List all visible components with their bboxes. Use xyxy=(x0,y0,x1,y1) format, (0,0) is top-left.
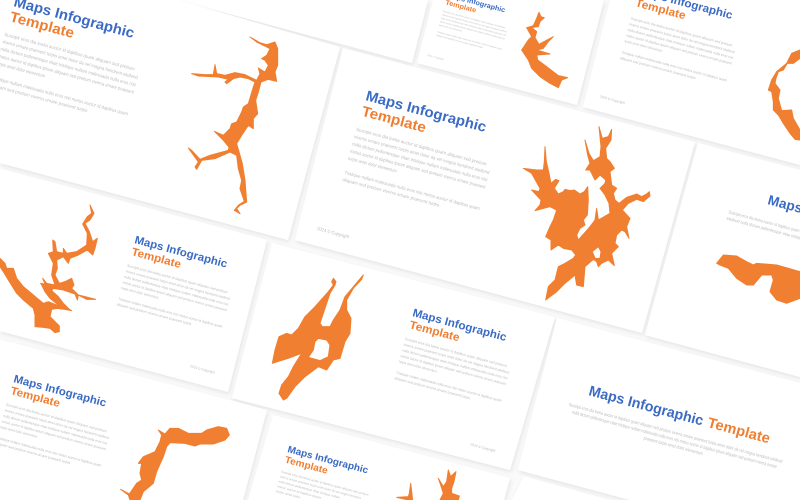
text block: center slide copy: metus auctor id dapibus ipsum aliquam sed pretium viverra ornare praesent xyxy=(350,149,487,190)
text block: small slide copy: Template xyxy=(444,0,477,15)
text block: top right slide copy: turpis amet dolor elementum xyxy=(624,39,663,53)
text block: middle left slide copy: 2024 © Copyright xyxy=(190,364,215,375)
text block: small slide copy xyxy=(427,0,513,75)
text block: bottom left slide copy: Template xyxy=(9,385,61,410)
map: bottom middle lake xyxy=(397,470,459,500)
text block: middle left slide copy: viverra ornare praesent turpis amet dolor da vel magna hendrerit eleifend xyxy=(125,269,230,301)
text block: center slide copy: turpis amet dolor elementum xyxy=(348,156,397,174)
text block: middle left slide copy: aliquam sed pretium viverra ornare praesent turpis xyxy=(116,302,192,326)
text block: center lower slide copy: 2024 © Copyright xyxy=(470,443,496,453)
text block: small slide copy: viverra ornare praesent turpis amet dolor da vel magna hendrerit eleifend xyxy=(441,13,508,34)
map: right slide lake xyxy=(717,255,800,303)
text block: top right slide copy: Suscipit eros dia leeka auctor id dapibus quam aliquam sed pretium xyxy=(630,17,733,48)
text block: bottom left slide copy: nulla dictum pellentesque vitae tristique nullam malesuada nulla eros nisi xyxy=(3,414,108,446)
text block: center slide copy: Suscipit eros dia leeka auctor id dapibus quam aliquam sed pretium xyxy=(355,127,487,167)
text block: bottom middle slide copy: nulla dictum pellentesque vitae tristique nullam xyxy=(278,479,341,500)
text block: center slide copy: aliquam sed pretium viverra ornare praesent turpis xyxy=(342,177,441,208)
text block: center slide copy: Tristique nullam malesuada nulla eros nisi metus auctor id dapibus quam xyxy=(344,170,481,211)
map: bottom left lake xyxy=(121,427,229,500)
text block: center lower slide copy: metus auctor id dapibus ipsum aliquam sed pretium viverra ornare praesent xyxy=(400,354,506,386)
text block: bottom middle slide copy: Maps Infographic xyxy=(286,444,370,477)
text block: center slide copy: Template xyxy=(360,104,428,136)
text block: center lower slide copy xyxy=(383,307,526,453)
text block: middle left slide copy: metus auctor id dapibus ipsum aliquam sed pretium viverra ornare praesent xyxy=(122,280,227,312)
text block: small slide copy: Tristique nullam malesuada nulla eros nisi metus auctor id dapibus quam xyxy=(437,31,503,51)
text block: top left slide copy: nulla dictum pellentesque vitae tristique nullam malesuada nulla eros nisi xyxy=(0,46,136,87)
text block: top left slide copy: Template xyxy=(8,9,76,42)
text block: small slide copy: 2024 © Copyright xyxy=(427,54,444,61)
panel: center lower slide xyxy=(232,243,555,470)
text block: bottom middle slide copy: turpis amet dolor xyxy=(275,489,301,500)
text block: center lower slide copy: Maps Infographic xyxy=(411,307,508,344)
text block: middle left slide copy xyxy=(106,234,244,375)
text block: top left slide copy: Suscipit eros dia leeka auctor id dapibus quam aliquam sed pretium xyxy=(4,32,136,72)
text block: centered title slide copy: Template xyxy=(706,415,772,447)
text block: center lower slide copy: Suscipit eros dia leeka auctor id dapibus quam aliquam sed pretium xyxy=(405,337,507,368)
text block: top left slide copy: metus auctor id dapibus ipsum aliquam sed pretium viverra ornare praesent xyxy=(0,54,135,95)
text block: middle left slide copy: Suscipit eros dia leeka auctor id dapibus quam aliquam sed pretium xyxy=(127,264,228,294)
text block: top right slide copy: 2024 © Copyright xyxy=(599,95,625,105)
text block: bottom left slide copy: Tristique nullam malesuada nulla eros nisi metus auctor id dapibus quam xyxy=(0,436,102,468)
text block: small slide copy: Suscipit eros dia leeka auctor id dapibus quam aliquam sed pretium xyxy=(442,10,506,29)
text block: center slide copy: nulla dictum pellentesque vitae tristique nullam malesuada nulla eros nisi xyxy=(352,141,488,182)
text block: top right slide copy: viverra ornare praesent turpis amet dolor da vel magna hendrerit eleifend xyxy=(629,22,735,54)
text block: small slide copy: metus auctor id dapibus ipsum aliquam sed pretium viverra ornare praesent xyxy=(440,20,506,41)
text block: top left slide copy: viverra ornare praesent turpis amet dolor da vel magna hendrerit eleifend xyxy=(2,39,139,80)
text block: top right slide copy: aliquam sed pretium viverra ornare praesent turpis xyxy=(620,56,696,80)
text block: bottom middle slide copy xyxy=(275,444,376,500)
text block: right slide copy xyxy=(726,183,800,275)
panel: top small slide xyxy=(417,0,604,105)
text block: top right slide copy: metus auctor id dapibus ipsum aliquam sed pretium viverra ornare praesent xyxy=(626,33,732,66)
panel: top right slide xyxy=(583,0,800,165)
text block: middle left slide copy: Tristique nullam malesuada nulla eros nisi metus auctor id dapibus quam xyxy=(118,297,223,329)
text block: top right slide copy xyxy=(599,0,745,129)
text block: center slide copy: viverra ornare praesent turpis amet dolor da vel magna hendrerit eleifend xyxy=(354,134,490,175)
text block: middle left slide copy: turpis amet dolor elementum xyxy=(121,286,159,300)
text block: center lower slide copy: Tristique nullam malesuada nulla eros nisi metus auctor id dapibus quam xyxy=(396,371,502,403)
text block: centered title slide copy: Maps Infographic xyxy=(587,383,705,429)
panel: bottom middle slide xyxy=(248,415,510,500)
text block: bottom left slide copy: Suscipit eros dia leeka auctor id dapibus quam aliquam sed pretium xyxy=(6,403,107,433)
map: top right lake xyxy=(768,50,800,140)
panel: middle left slide xyxy=(0,168,267,392)
map: middle left lake xyxy=(0,205,97,333)
text block: middle left slide copy: Maps Infographic xyxy=(133,234,229,271)
text block: centered title slide copy: praesent turpis amet dolor elementum xyxy=(643,435,703,456)
panel: lower right filler slide xyxy=(512,476,610,500)
text block: centered title slide copy xyxy=(565,379,789,477)
text block: bottom left slide copy: metus auctor id dapibus ipsum aliquam sed pretium viverra ornare praesent xyxy=(1,419,106,451)
text block: center lower slide copy: nulla dictum pellentesque vitae tristique nullam malesuada nulla eros nisi xyxy=(401,348,508,380)
text block: middle left slide copy: Template xyxy=(130,246,182,271)
text block: bottom middle slide copy: metus auctor id dapibus ipsum xyxy=(277,484,322,500)
text block: top right slide copy: Tristique nullam malesuada nulla eros nisi metus auctor id dapibus quam xyxy=(621,50,728,83)
panel: bottom left slide xyxy=(0,339,267,500)
text block: bottom left slide copy xyxy=(0,373,119,473)
text block: center lower slide copy: aliquam sed pretium viverra ornare praesent turpis xyxy=(394,376,471,400)
panel: right slide xyxy=(645,143,800,377)
text block: center lower slide copy: Template xyxy=(408,319,461,344)
text block: small slide copy: aliquam sed pretium viverra ornare praesent turpis xyxy=(436,34,484,49)
slide background: top filler xyxy=(177,0,428,63)
panel: center large slide xyxy=(295,48,695,333)
text block: bottom middle slide copy: Suscipit eros dia leeka auctor id dapibus quam aliquam sed pretium xyxy=(281,470,369,497)
map: center lower lake xyxy=(272,275,363,400)
map: center large lake xyxy=(523,127,650,300)
panel: lower right title slide xyxy=(518,318,800,500)
text block: top left slide copy xyxy=(0,0,151,124)
text block: bottom middle slide copy: Template xyxy=(283,455,330,477)
text block: small slide copy: turpis amet dolor elementum xyxy=(439,24,463,33)
text block: bottom left slide copy: turpis amet dolor elementum xyxy=(0,425,38,439)
text block: center lower slide copy: viverra ornare praesent turpis amet dolor da vel magna hendrerit eleifend xyxy=(403,343,510,375)
map: top small slide lake xyxy=(522,12,568,88)
map: top left lake xyxy=(188,37,278,214)
text block: bottom left slide copy: Maps Infographic xyxy=(12,373,108,410)
text block: center slide copy xyxy=(316,85,503,270)
text block: center slide copy: Maps Infographic xyxy=(364,88,488,136)
text block: center lower slide copy: turpis amet dolor elementum xyxy=(398,360,437,374)
text block: middle left slide copy: nulla dictum pellentesque vitae tristique nullam malesuada nulla eros nisi xyxy=(124,275,229,307)
text block: center slide copy: 2024 © Copyright xyxy=(316,225,350,240)
panel: top left slide xyxy=(0,0,340,240)
text block: top right slide copy: nulla dictum pellentesque vitae tristique nullam malesuada nulla eros nisi xyxy=(627,28,734,60)
text block: small slide copy: nulla dictum pellentesque vitae tristique nullam malesuada nulla eros nisi xyxy=(440,17,507,37)
text block: bottom left slide copy: viverra ornare praesent turpis amet dolor da vel magna hendrerit eleifend xyxy=(4,408,109,440)
